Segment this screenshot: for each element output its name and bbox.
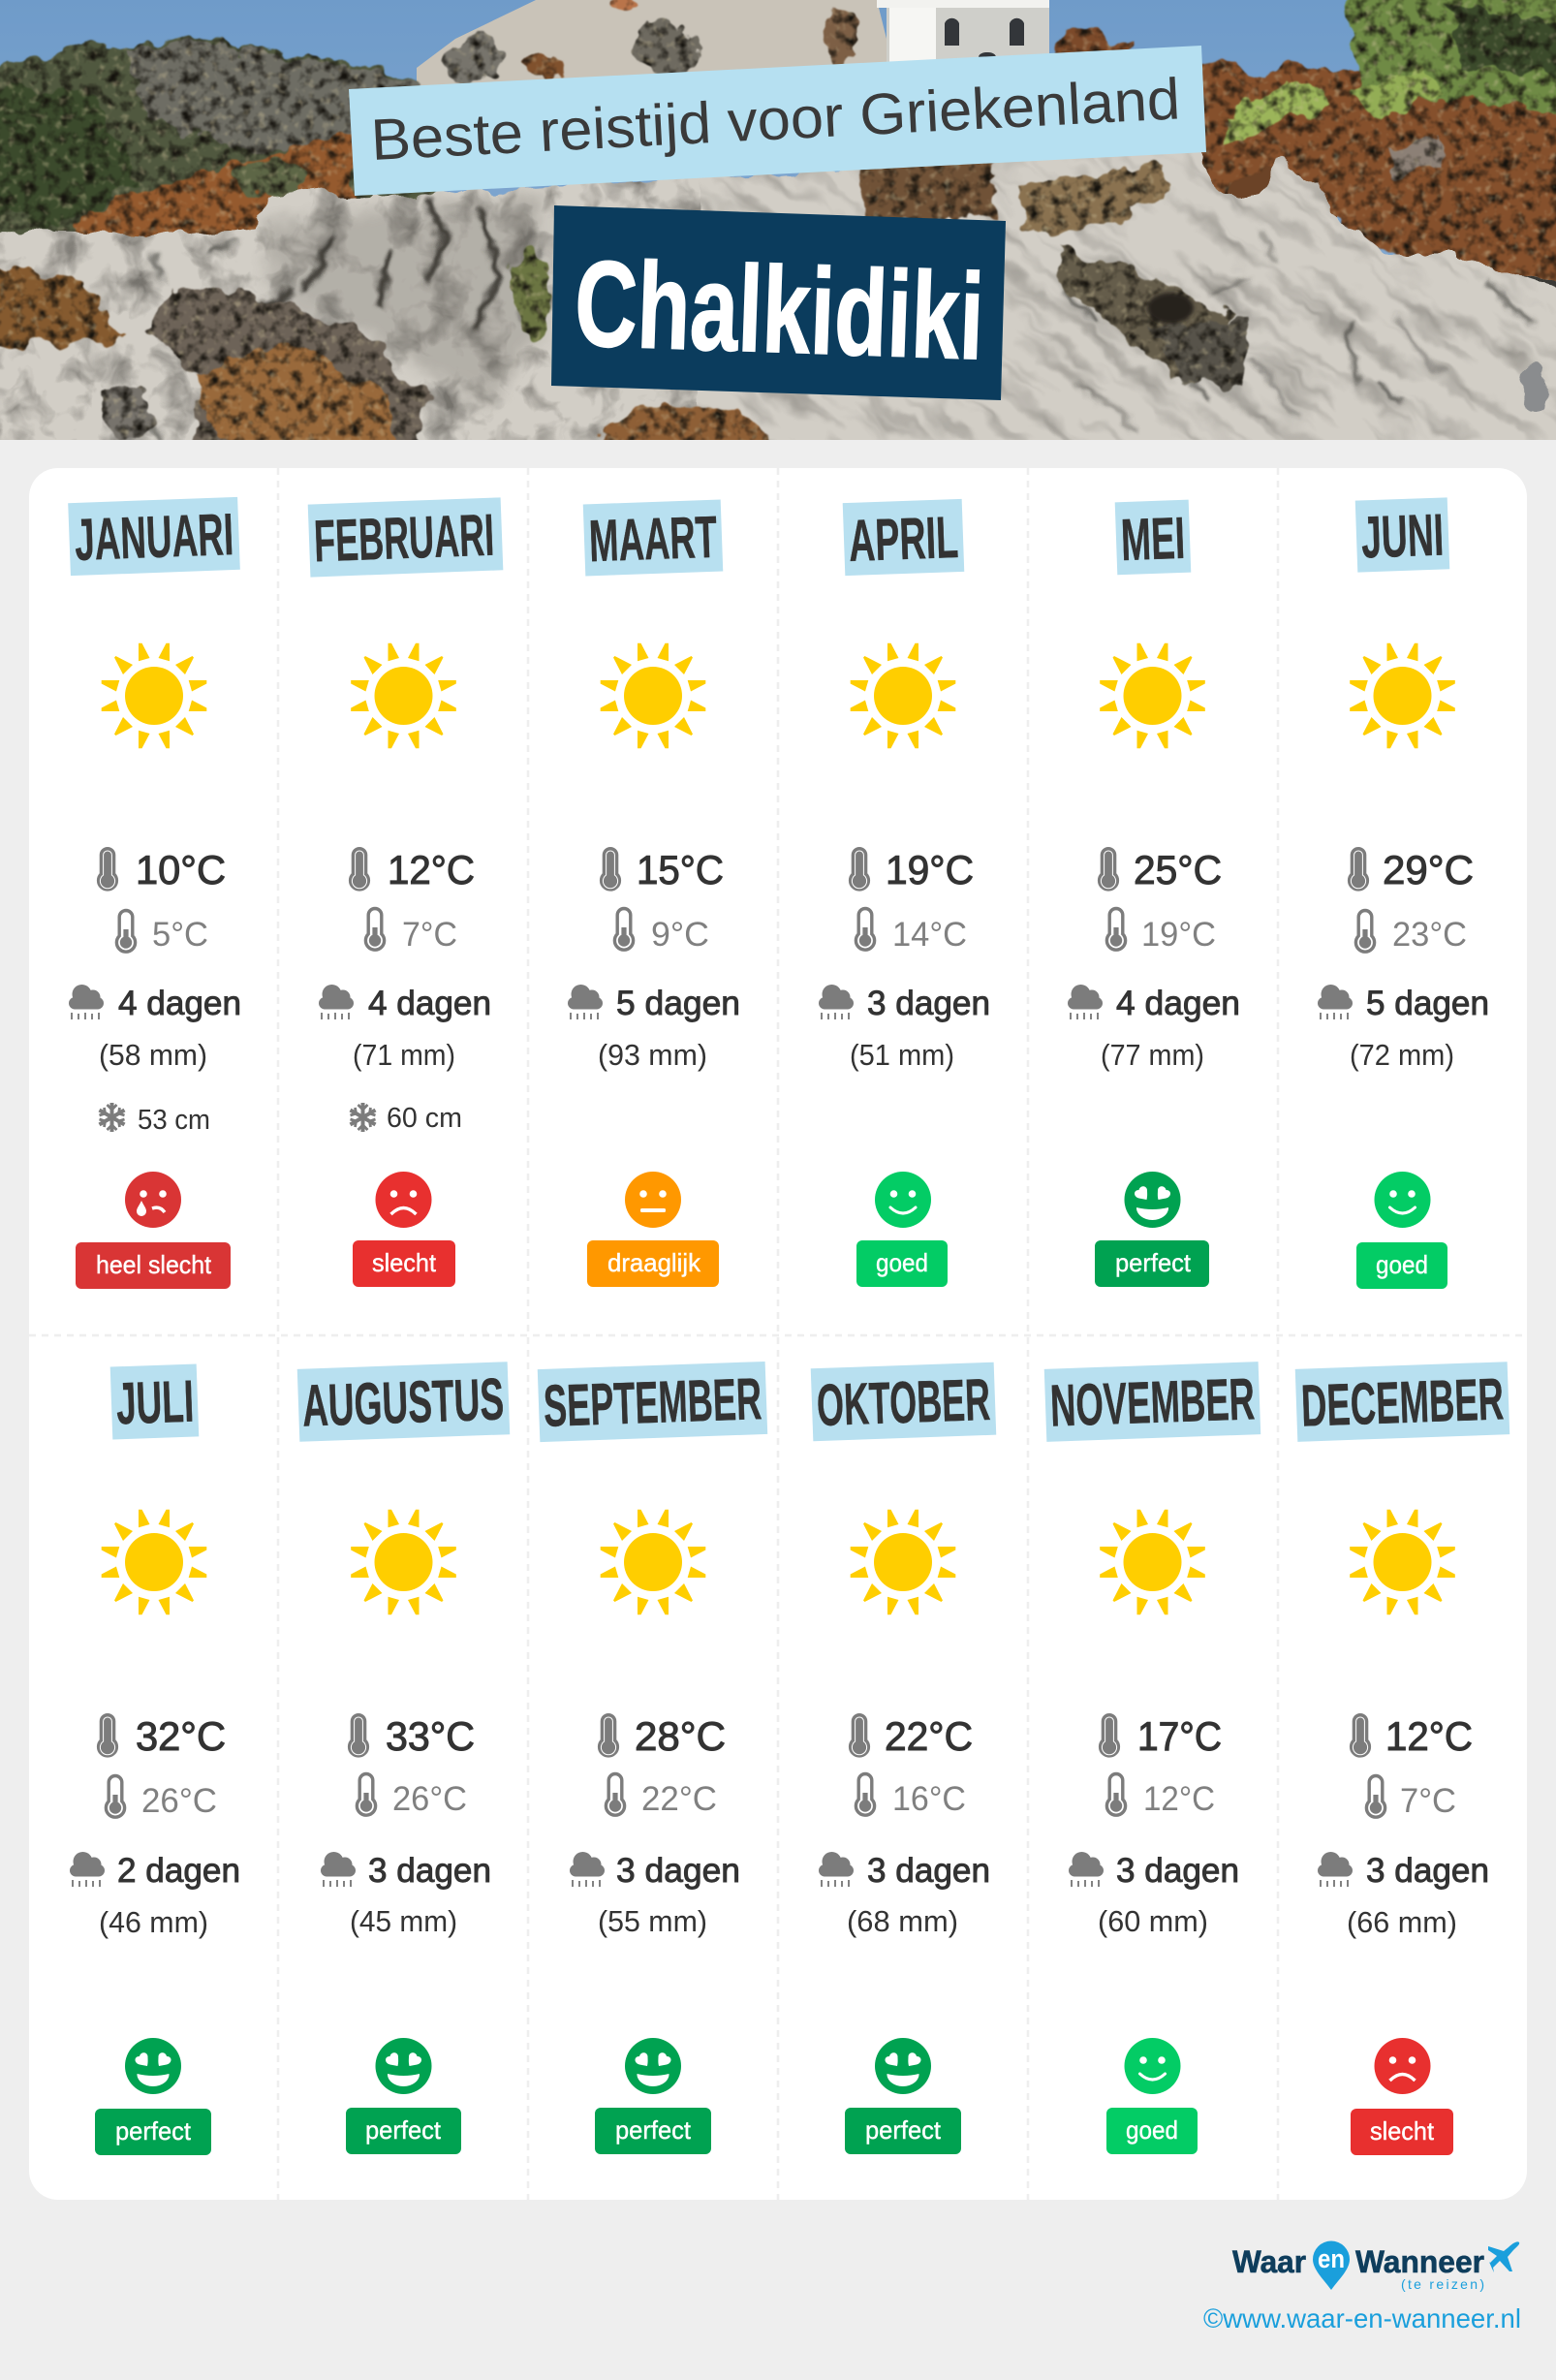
max temperature: 32°C [136,1713,226,1759]
logo: Waar en Wanneer: Waar [1232,2244,1306,2279]
rain days: 3 dagen [1116,1852,1239,1890]
rating: goed [876,1248,928,1277]
rainfall: (68 mm) [847,1904,958,1938]
copyright url: ©www.waar-en-wanneer.nl [1203,2303,1521,2333]
min temperature [106,1775,217,1820]
max temperature: 29°C [1383,847,1474,892]
rainfall: (55 mm) [598,1904,707,1938]
snow: 60 cm [387,1103,462,1134]
rainfall: (58 mm) [99,1038,207,1072]
icon: sun [351,1510,456,1614]
rating [1351,2038,1453,2155]
max temperature [349,1713,475,1759]
rating [845,2038,961,2154]
min temperature: 5°C [152,916,208,954]
month label [1044,1362,1260,1442]
min temperature [856,909,967,954]
min temperature: 19°C [1141,916,1216,954]
month label [1355,497,1449,573]
month label: JULI [115,1368,195,1436]
rain days: 5 dagen [1366,985,1489,1022]
month: mei [1068,500,1240,1287]
month: juli [70,1363,240,2155]
month: december [1295,1362,1509,2155]
max temperature: 15°C [637,847,724,892]
min temperature: 26°C [141,1782,217,1820]
min temperature: 7°C [402,916,457,954]
min temperature [1366,1775,1456,1820]
rain days: 4 dagen [1116,985,1240,1022]
banner: subtitle [349,46,1206,196]
max temperature: 28°C [635,1713,726,1759]
rain days: 3 dagen [1366,1852,1489,1890]
rain days: 3 dagen [867,985,990,1022]
rating: perfect [865,2115,942,2145]
min temperature [856,1773,966,1818]
month: november [1044,1362,1260,2154]
month label: AUGUSTUS [301,1365,505,1439]
icon: map pin [1313,2240,1350,2290]
icon: sun [601,643,705,748]
icon: sun [851,1510,955,1614]
month: april [819,499,990,1287]
max temperature [601,847,724,892]
rating: goed [1376,1250,1428,1279]
rainfall: (93 mm) [598,1038,707,1072]
max temperature: 12°C [388,847,475,892]
rating: slecht [1370,2116,1435,2145]
rating [1106,2038,1198,2154]
month: juni [1318,497,1489,1289]
max temperature [1100,1713,1222,1759]
min temperature [606,1773,717,1818]
rating [587,1172,719,1287]
icon: sun [601,1510,705,1614]
rating [346,2038,461,2154]
min temperature [365,909,457,954]
max temperature: 17°C [1137,1713,1222,1759]
max temperature: 25°C [1134,847,1222,892]
icon: sun [1100,643,1205,748]
rating: goed [1126,2115,1178,2145]
month label [538,1362,767,1442]
max temperature: 19°C [886,847,974,892]
rating: perfect [615,2115,692,2145]
rating: perfect [115,2116,192,2145]
rating [1095,1172,1209,1287]
rating: slecht [372,1248,437,1277]
month label [583,500,723,576]
min temperature [614,909,709,954]
rainfall: (72 mm) [1350,1038,1454,1072]
rating [76,1172,231,1289]
month label [811,1362,996,1441]
max temperature: 22°C [885,1713,973,1759]
min temperature: 7°C [1400,1782,1456,1820]
month label: APRIL [848,504,959,574]
month label: JUNI [1360,502,1445,570]
snow: 53 cm [138,1105,210,1136]
rating [595,2038,711,2154]
rating: perfect [1115,1248,1192,1277]
rating: heel slecht [96,1250,212,1279]
month: maart [568,500,740,1287]
month: oktober [811,1362,996,2154]
month label: NOVEMBER [1049,1365,1256,1439]
min temperature: 16°C [892,1780,966,1818]
min temperature: 23°C [1392,916,1467,954]
banner: title: Chalkidiki [573,235,986,385]
month: januari [68,497,241,1289]
min temperature: 26°C [392,1780,467,1818]
panel: months card [29,468,1527,2200]
rainfall: (71 mm) [353,1038,455,1072]
icon: sun [851,643,955,748]
logo: Waar en Wanneer: (te reizen) [1401,2276,1484,2292]
month label [308,497,503,578]
min temperature [1106,1773,1215,1818]
min temperature [357,1773,467,1818]
rain days: 3 dagen [368,1852,491,1890]
month label [68,497,240,576]
month: augustus [297,1362,510,2154]
rain days: 4 dagen [368,985,491,1022]
rating [95,2038,211,2155]
rating [1356,1172,1447,1289]
month label: OKTOBER [816,1366,991,1438]
rain days: 3 dagen [867,1852,990,1890]
min temperature: 9°C [651,916,709,954]
snow [99,1103,210,1136]
max temperature [850,847,974,892]
icon: sun [1100,1510,1205,1614]
rating [353,1172,455,1287]
icon: map pin: en [1318,2244,1345,2273]
rain days: 5 dagen [616,985,740,1022]
month label: MEI [1120,505,1186,573]
month label [843,499,964,576]
month label: JANUARI [74,501,234,573]
rainfall: (77 mm) [1101,1038,1204,1072]
month label [297,1362,510,1442]
month: september [538,1362,767,2154]
rating: draaglijk [607,1248,701,1277]
icon: sun [102,1510,206,1614]
rainfall: (60 mm) [1098,1904,1208,1938]
rating: perfect [365,2115,442,2145]
month label: FEBRUARI [313,502,495,574]
max temperature [350,847,475,892]
header photo: coastal rocks with shrubs and white tower [0,0,1556,440]
month label [1115,500,1191,575]
icon: sun [1350,1510,1455,1614]
rating [856,1172,948,1287]
rainfall: (45 mm) [350,1904,457,1938]
banner: title [551,205,1006,400]
min temperature [1355,911,1467,954]
max temperature: 33°C [386,1713,475,1759]
snow [351,1103,462,1134]
month label [110,1363,199,1440]
rain days: 4 dagen [118,985,241,1022]
rain days: 3 dagen [616,1852,740,1890]
rainfall: (66 mm) [1347,1905,1457,1939]
max temperature: 10°C [136,847,226,892]
month label: MAART [588,504,718,574]
max temperature: 12°C [1385,1713,1473,1759]
month: februari [308,497,503,1287]
logo: Waar en Wanneer [1232,2240,1519,2292]
month label: SEPTEMBER [543,1365,762,1439]
icon: sun [1350,643,1455,748]
min temperature [1106,909,1216,954]
icon: sun [102,643,206,748]
icon: sun [351,643,456,748]
min temperature: 12°C [1143,1780,1215,1818]
max temperature [1351,1713,1473,1759]
logo: Waar en Wanneer: Wanneer [1355,2244,1484,2279]
min temperature: 14°C [892,916,967,954]
min temperature [116,911,208,954]
rainfall: (51 mm) [850,1038,954,1072]
rainfall: (46 mm) [99,1905,208,1939]
rock face [0,152,1556,440]
banner: subtitle: Beste reistijd voor Griekenland [369,66,1182,172]
min temperature: 22°C [641,1780,717,1818]
icon: plane [1488,2241,1519,2272]
rain days: 2 dagen [117,1852,240,1890]
